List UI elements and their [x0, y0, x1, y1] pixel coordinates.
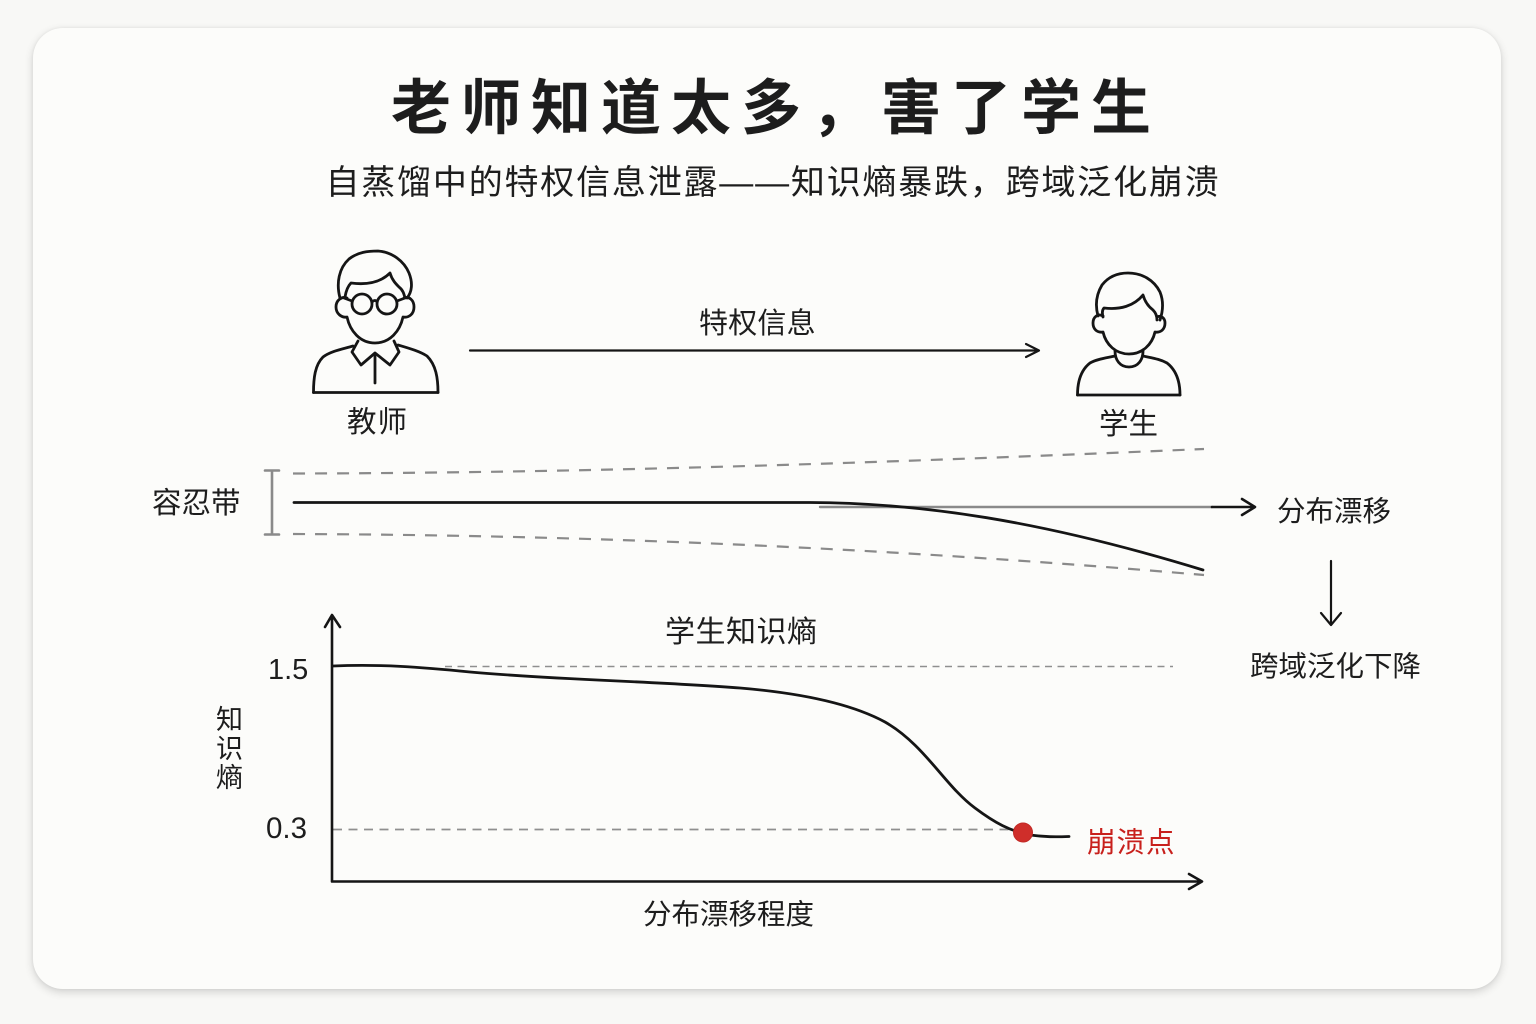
y tick 0.3: 0.3 [266, 812, 307, 845]
label: distribution drift: 分布漂移 [1277, 496, 1391, 528]
lower tolerance boundary [293, 534, 1204, 575]
arrow: privileged information [470, 344, 1039, 357]
reference line 1.5 [445, 666, 1173, 668]
entropy curve [333, 665, 1069, 837]
y axis label: 识 [216, 734, 243, 764]
label: collapse point: 崩溃点 [1087, 827, 1176, 859]
axes [325, 615, 1202, 889]
y axis label: 熵 [216, 763, 243, 793]
drift curve [294, 502, 1203, 570]
x axis label: 分布漂移程度 [643, 899, 814, 931]
label: cross-domain generalization drop: 跨域泛化下降 [1250, 651, 1421, 683]
arrow: drift leads to generalization drop [1321, 561, 1341, 625]
icon: student [1078, 273, 1180, 395]
label: tolerance band: 容忍带 [152, 487, 241, 520]
label: student: 学生 [1099, 408, 1158, 441]
label: teacher: 教师 [347, 406, 408, 439]
upper tolerance boundary [293, 449, 1204, 474]
icon: teacher [314, 251, 438, 392]
reference line 0.3 [333, 828, 1012, 830]
bracket: tolerance band [265, 470, 279, 534]
label: privileged information: 特权信息 [699, 307, 816, 340]
collapse point marker [1014, 823, 1032, 842]
y tick 1.5: 1.5 [268, 654, 308, 686]
subtitle: 自蒸馏中的特权信息泄露——知识熵暴跌，跨域泛化崩溃 [326, 164, 1220, 202]
chart title: 学生知识熵 [665, 616, 818, 649]
title: 老师知道太多，害了学生 [391, 75, 1161, 142]
y axis label: 知 [216, 705, 243, 735]
chart: student knowledge entropy [216, 615, 1202, 931]
arrow: distribution drift [820, 499, 1255, 515]
